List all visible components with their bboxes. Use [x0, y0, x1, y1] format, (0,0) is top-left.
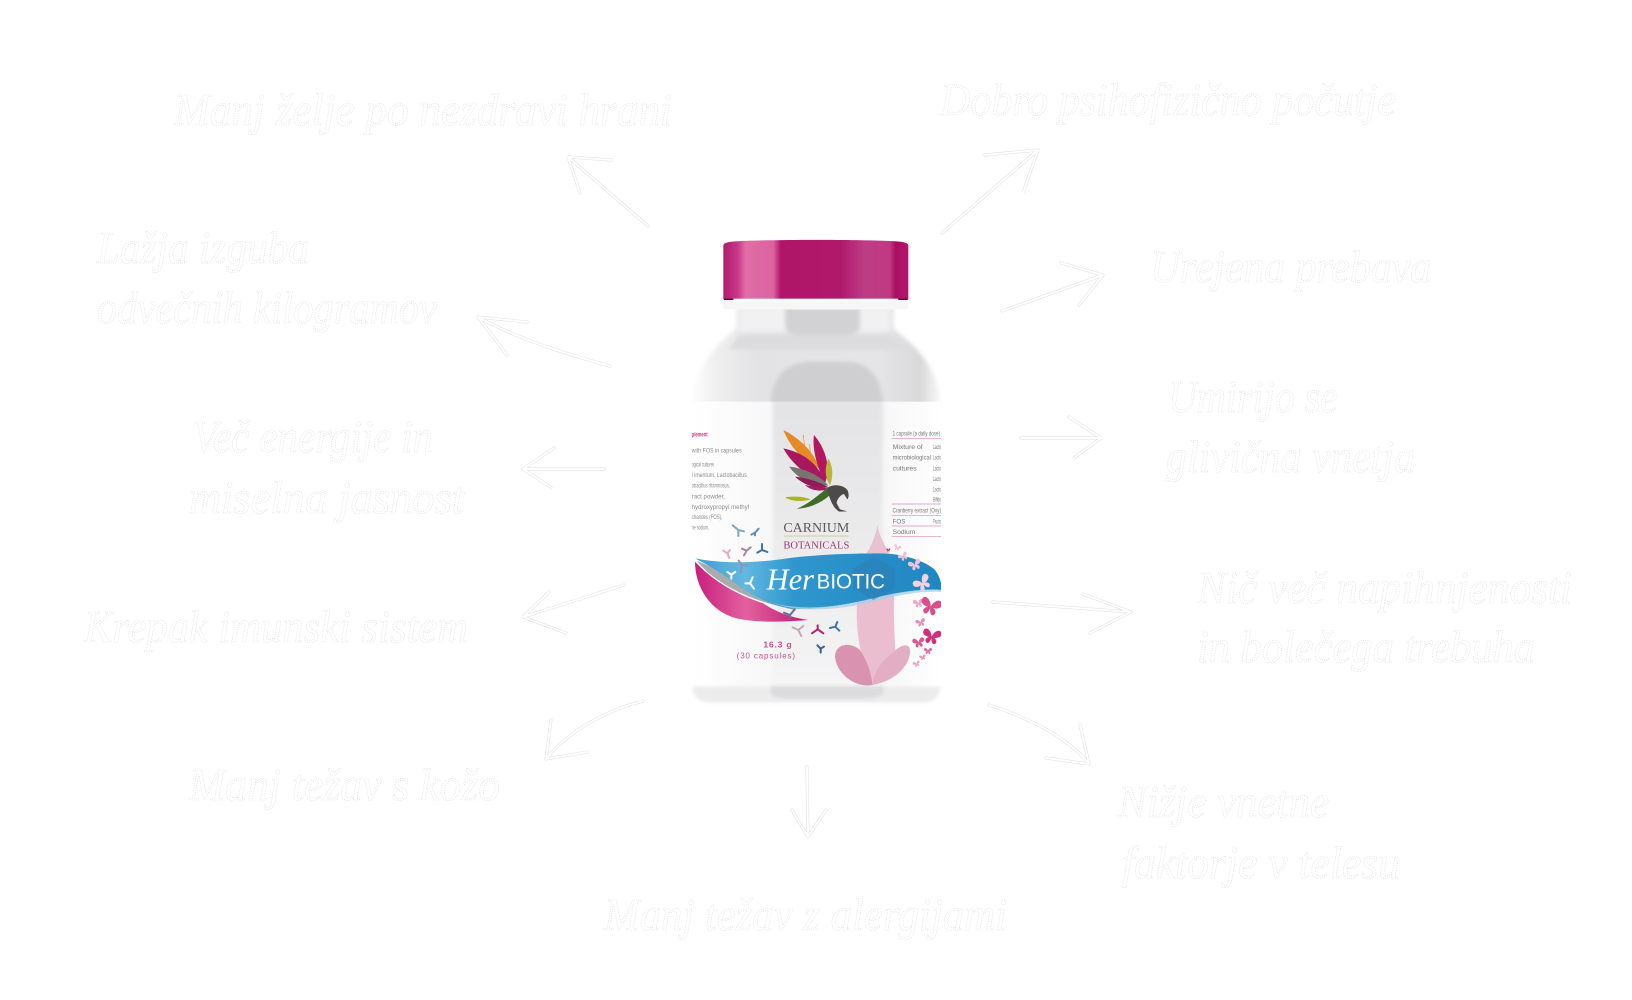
- left label text: obacillus rhamnosus,: [692, 483, 730, 490]
- product bottle: [691, 240, 943, 703]
- left label text: ogical cultures: [692, 462, 714, 469]
- antibody icons: [723, 525, 839, 653]
- label background: [692, 402, 941, 695]
- left label text: [691, 433, 749, 531]
- left label text: ract powder,: [692, 493, 725, 500]
- product name: BIOTIC: [817, 570, 885, 594]
- arrow: down: [792, 767, 826, 837]
- text: Urejena prebava: Urejena prebava: [1150, 241, 1431, 292]
- label artwork: Lacto: [933, 487, 941, 494]
- right label table: [892, 430, 941, 537]
- right label table: microbiological: [893, 455, 931, 462]
- left label text: hydroxypropyl methyl: [692, 504, 749, 511]
- bottle shoulder and neck shading: [692, 307, 941, 410]
- text: Umirijo se glivična vnetja: Umirijo se: [1168, 371, 1338, 422]
- grey swoosh: [697, 561, 797, 611]
- neck ring: [723, 299, 908, 309]
- weight: (30 capsules): [737, 651, 795, 660]
- label artwork: Lacto: [933, 455, 941, 462]
- product name: Her: [766, 562, 815, 596]
- right label table: 1 capsule (a daily dose): [893, 430, 940, 437]
- bird logo: [783, 430, 849, 512]
- text: Umirijo se glivična vnetja: [1166, 371, 1415, 482]
- text: Nič več napihnjenosti in bolečega trebuha: in bolečega trebuha: [1197, 621, 1535, 672]
- right label table: Mixture of: [893, 444, 923, 451]
- left label text: with FOS in capsules: [691, 447, 742, 454]
- text: Umirijo se glivična vnetja: glivična vnetja: [1166, 431, 1415, 482]
- right label table: FOS: [893, 518, 906, 525]
- arrow: to top right: [942, 150, 1038, 233]
- text: Nič več napihnjenosti in bolečega trebuha: [1196, 562, 1572, 672]
- arrow: to lower left: [523, 585, 624, 633]
- arrow: to top left: [568, 157, 648, 226]
- text: Lažja izguba odvečnih kilogramov: [96, 222, 438, 333]
- text: Več energije in miselna jasnost: Več energije in: [193, 411, 433, 462]
- text: Krepak imunski sistem: Krepak imunski sistem: [83, 601, 468, 652]
- left label text: plement: [692, 433, 708, 439]
- label artwork: Lacto: [933, 444, 941, 451]
- blue swoosh: [695, 553, 942, 609]
- brand name: CARNIUM: [783, 520, 849, 535]
- text: Nižje vnetne faktorje v telesu: [1117, 776, 1400, 888]
- butterflies: [886, 544, 943, 668]
- weight: [737, 642, 795, 660]
- text: Nižje vnetne faktorje v telesu: Nižje vnetne: [1117, 776, 1329, 827]
- figure illustration: [835, 525, 910, 686]
- left label text: l imentum, Lactobacillus: [692, 472, 747, 479]
- arrow: bottom left curve: [546, 701, 643, 759]
- arrow: to right: [1021, 417, 1101, 458]
- arrow: bottom right curve: [989, 705, 1089, 764]
- infographic canvas: [84, 82, 1571, 940]
- arrow: to upper right: [1002, 263, 1103, 311]
- brand name: [783, 520, 849, 552]
- text: Več energije in miselna jasnost: miselna jasnost: [189, 472, 465, 523]
- text: Manj težav s kožo: Manj težav s kožo: [188, 759, 500, 810]
- pink swoosh: [695, 562, 808, 622]
- text: Lažja izguba odvečnih kilogramov: Lažja izguba: [96, 222, 309, 273]
- label artwork: Lacto: [933, 476, 941, 483]
- brand name: BOTANICALS: [783, 541, 849, 552]
- right label table: Cranberry extract (Oxy): [893, 507, 941, 514]
- arrow: to upper left: [478, 317, 610, 366]
- left label text: charides (FOS),: [692, 514, 722, 521]
- text: Manj težav z alergijami: Manj težav z alergijami: [603, 889, 1007, 940]
- label artwork: [691, 430, 943, 686]
- label artwork: Lacto: [933, 465, 941, 472]
- text: Lažja izguba odvečnih kilogramov: odvečnih kilogramov: [97, 282, 438, 333]
- hexagon overlay: [853, 557, 895, 600]
- label artwork: Fructo: [933, 518, 941, 525]
- label artwork: Bifido: [933, 497, 941, 504]
- text: Dobro psihofizično počutje: Dobro psihofizično počutje: [939, 74, 1396, 125]
- left label text: ne sodium,: [692, 524, 709, 531]
- right label table: cultures: [893, 465, 917, 472]
- text: Nižje vnetne faktorje v telesu: faktorje v telesu: [1122, 837, 1400, 888]
- text: Več energije in miselna jasnost: [189, 411, 465, 523]
- bottle base shading: [693, 686, 940, 703]
- arrow: to left: [523, 448, 604, 488]
- label centre panel: [772, 402, 883, 612]
- product name: [766, 570, 884, 590]
- light band under blue swoosh: [773, 589, 942, 609]
- weight: 16.3 g: [763, 640, 792, 650]
- right label table: Sodium: [893, 529, 916, 536]
- cap: [723, 240, 908, 301]
- text: Manj želje po nezdravi hrani: Manj želje po nezdravi hrani: [173, 84, 672, 135]
- text: Nič več napihnjenosti in bolečega trebuha: Nič več napihnjenosti: [1196, 562, 1572, 613]
- arrow: to lower right: [993, 594, 1131, 633]
